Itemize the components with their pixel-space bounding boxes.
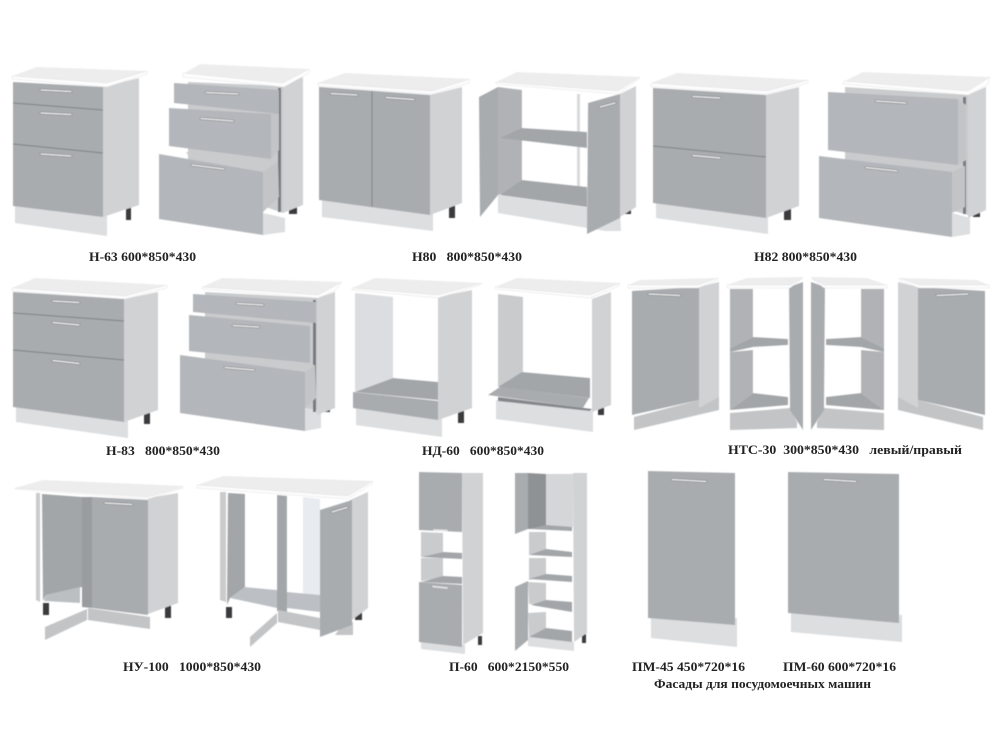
- cabinet: П-60 closed: [419, 472, 483, 654]
- panel: ПМ-60 facade: [788, 472, 902, 642]
- panel: ПМ-45 facade: [648, 471, 737, 647]
- label: ПМ-45: ПМ-45 450*720*16: [632, 660, 745, 674]
- cabinet: Н-83 closed: [12, 278, 167, 438]
- cabinet: П-60 open: [515, 473, 587, 651]
- label: ПМ-60: ПМ-60 600*720*16: [783, 660, 896, 674]
- cabinet: НТС-30 left open: [727, 277, 803, 430]
- cabinet: Н-63 closed: [12, 67, 147, 236]
- cabinet: НТС-30 right closed: [898, 278, 989, 430]
- cabinet: НД-60 closed: [352, 278, 482, 437]
- label: НУ-100: НУ-100 1000*850*430: [123, 660, 261, 674]
- cabinet: Н-63 open: [159, 64, 309, 235]
- cabinet: НТС-30 right open: [811, 277, 887, 430]
- label: Н80: Н80 800*850*430: [412, 250, 522, 264]
- cabinet: Н82 closed: [651, 73, 808, 234]
- caption: dishwasher facades: Фасады для посудомоечных машин: [654, 677, 871, 691]
- label: НД-60: НД-60 600*850*430: [422, 444, 544, 458]
- label: Н-63: Н-63 600*850*430: [89, 250, 196, 264]
- cabinet: НУ-100 open: [197, 476, 373, 647]
- cabinet: Н82 open: [819, 72, 990, 237]
- cabinet: НД-60 open: [488, 278, 620, 432]
- label: Н-83: Н-83 800*850*430: [106, 444, 220, 458]
- cabinet: НТС-30 left closed: [628, 278, 719, 430]
- label: Н82: Н82 800*850*430: [754, 250, 857, 264]
- cabinet: НУ-100 closed: [15, 480, 184, 640]
- cabinet: Н80 open: [479, 72, 640, 234]
- cabinet: Н80 closed: [318, 73, 470, 231]
- label: НТС-30: НТС-30 300*850*430 левый/правый: [728, 443, 962, 457]
- cabinet: Н-83 open: [180, 278, 342, 431]
- label: П-60: П-60 600*2150*550: [449, 660, 569, 674]
